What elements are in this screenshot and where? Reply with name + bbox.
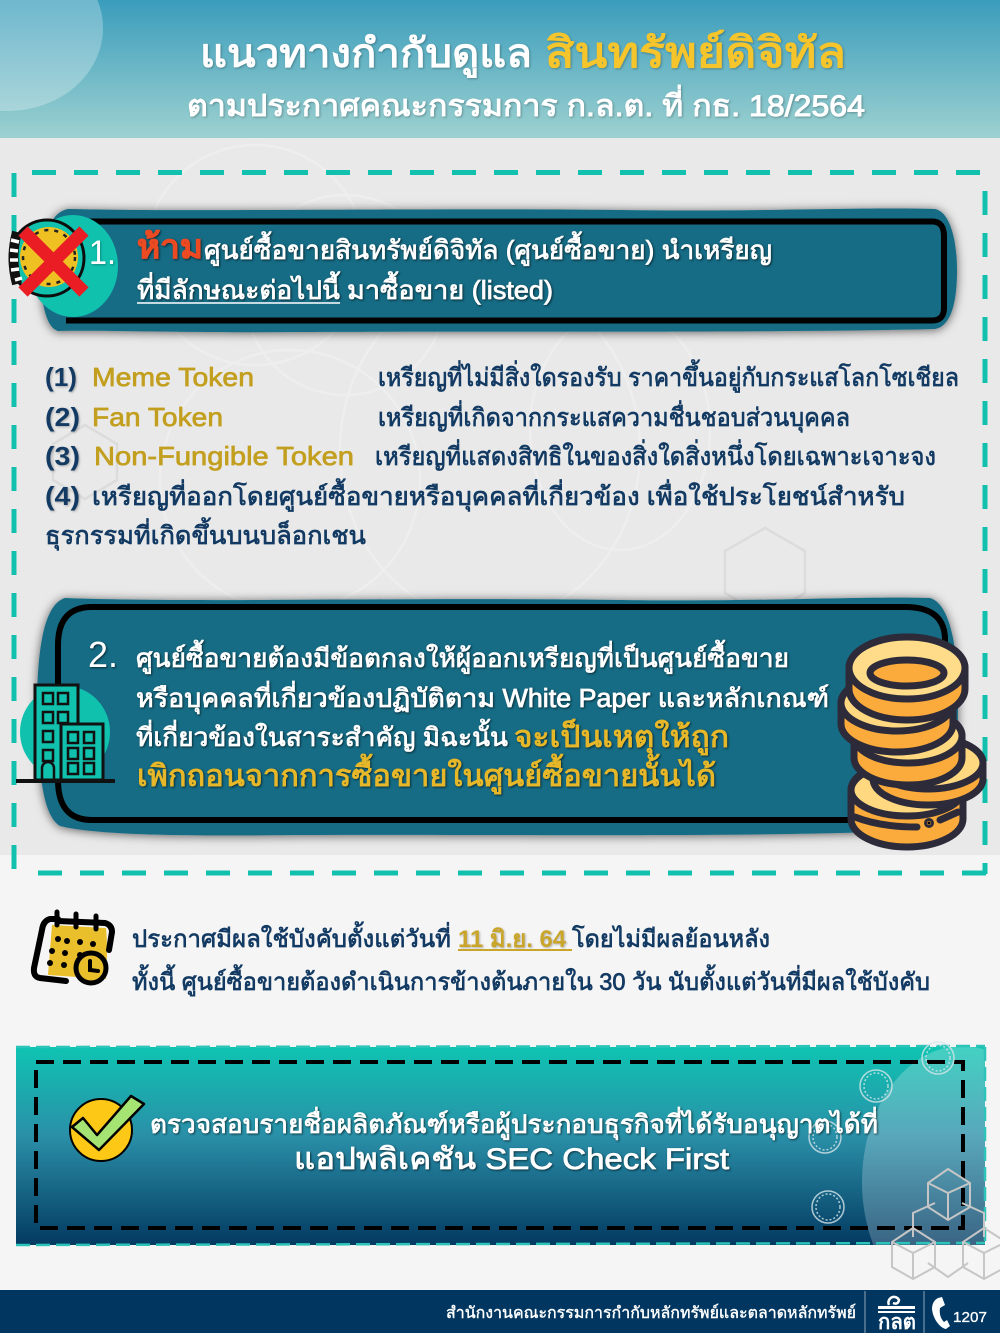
SEC logo (878, 1297, 916, 1333)
prohibition heading text (137, 228, 772, 305)
number 2: 2. (88, 634, 118, 675)
check first text: ตรวจสอบรายชื่อผลิตภัณฑ์หรือผู้ประกอบธุรกิจที่ได้รับอนุญาตได้ที่ (150, 1107, 878, 1140)
item 1: Meme Token (45, 359, 959, 393)
effective date notice: ประกาศมีผลใช้บังคับตั้งแต่วันที่ (132, 921, 451, 953)
prohibition heading text: ที่มีลักษณะต่อไปนี้ (137, 271, 340, 305)
phone icon and hotline: 1207 (953, 1309, 987, 1326)
teal dashed frame (14, 172, 986, 874)
title (200, 29, 846, 78)
icon: office buildings (16, 685, 115, 783)
subtitle: ตามประกาศคณะกรรมการ ก.ล.ต. ที่ กธ. 18/2564 (187, 85, 865, 123)
bottom panel: SEC Check First (16, 1041, 986, 1246)
item 1: Meme Token: (1) (45, 362, 77, 392)
item 4: exchange-issued coins: เหรียญที่ออกโดยศูนย์ซื้อขายหรือบุคคลที่เกี่ยวข้อง เพื่อใช้ประโยชน์สำหรับ (92, 478, 905, 512)
phone icon and hotline (932, 1297, 987, 1329)
footer bar (0, 1290, 1000, 1333)
black dashed frame (36, 1062, 963, 1228)
header band (0, 0, 1000, 138)
teal oval badge (28, 215, 118, 317)
item 3: Non-Fungible Token: เหรียญที่แสดงสิทธิในของสิ่งใดสิ่งหนึ่งโดยเฉพาะเจาะจง (375, 439, 936, 471)
item 1: Meme Token: Meme Token (92, 362, 254, 392)
inner black outline (62, 222, 944, 320)
panel 2 body text: จะเป็นเหตุให้ถูก (514, 718, 729, 756)
prohibition heading text: ศูนย์ซื้อขายสินทรัพย์ดิจิทัล (ศูนย์ซื้อขาย) นำเหรียญ (204, 231, 772, 266)
panel 2: white paper agreement (16, 598, 983, 847)
effective date notice (132, 921, 930, 997)
icon: yellow check badge (70, 1096, 144, 1161)
panel 2 body text (136, 640, 829, 795)
list of prohibited token types (45, 359, 959, 551)
item 2: Fan Token: (2) (45, 402, 80, 432)
panel 2 body text: หรือบุคคลที่เกี่ยวข้องปฏิบัติตาม White Paper และหลักเกณฑ์ (136, 681, 829, 714)
item 2: Fan Token (45, 400, 850, 433)
prohibition heading text: มาซื้อขาย (listed) (347, 271, 553, 305)
number 1: 1. (89, 234, 116, 272)
icon: blockchain cubes (892, 1169, 1000, 1279)
item 2: Fan Token: เหรียญที่เกิดจากกระแสความชื่นชอบส่วนบุคคล (378, 400, 850, 433)
icon: crossed-out coin (10, 220, 84, 296)
item 4: exchange-issued coins (45, 478, 905, 551)
effective date notice: 11 มิ.ย. 64 (458, 926, 567, 953)
inner black outline (58, 607, 945, 820)
item 3: Non-Fungible Token: Non-Fungible Token (94, 441, 354, 471)
item 4: exchange-issued coins: (4) (45, 481, 80, 511)
panel 2 body text: เพิกถอนจากการซื้อขายในศูนย์ซื้อขายนั้นได้ (137, 753, 716, 795)
prohibition heading text: ห้าม (137, 228, 203, 265)
decorative outline coins (809, 1042, 954, 1223)
panel 1: prohibition (10, 209, 957, 332)
panel 2 body text: ที่เกี่ยวข้องในสาระสำคัญ มิฉะนั้น (136, 719, 508, 752)
icon: coin stack (841, 637, 983, 847)
effective date notice: โดยไม่มีผลย้อนหลัง (572, 925, 770, 953)
item 3: Non-Fungible Token (45, 439, 936, 471)
check first text: แอปพลิเคชัน SEC Check First (294, 1143, 730, 1176)
rough teal edge (16, 1046, 985, 1245)
title: สินทรัพย์ดิจิทัล (545, 29, 846, 76)
title: แนวทางกำกับดูแล (200, 32, 532, 78)
item 1: Meme Token: เหรียญที่ไม่มีสิ่งใดรองรับ ราคาขึ้นอยู่กับกระแสโลกโซเชียล (378, 359, 959, 393)
item 4: exchange-issued coins: ธุรกรรมที่เกิดขึ้นบนบล็อกเชน (45, 517, 366, 551)
icon: calendar with clock (34, 912, 112, 983)
faint watermark: coins and blocks (53, 145, 805, 620)
effective date notice: ทั้งนี้ ศูนย์ซื้อขายต้องดำเนินการข้างต้นภายใน 30 วัน นับตั้งแต่วันที่มีผลใช้บังคับ (132, 964, 930, 997)
check first text (150, 1107, 878, 1176)
footer organisation name: สำนักงานคณะกรรมการกำกับหลักทรัพย์และตลาดหลักทรัพย์ (446, 1303, 856, 1322)
panel 2 body text: ศูนย์ซื้อขายต้องมีข้อตกลงให้ผู้ออกเหรียญที่เป็นศูนย์ซื้อขาย (136, 640, 789, 674)
item 3: Non-Fungible Token: (3) (45, 441, 80, 471)
item 2: Fan Token: Fan Token (92, 402, 223, 432)
